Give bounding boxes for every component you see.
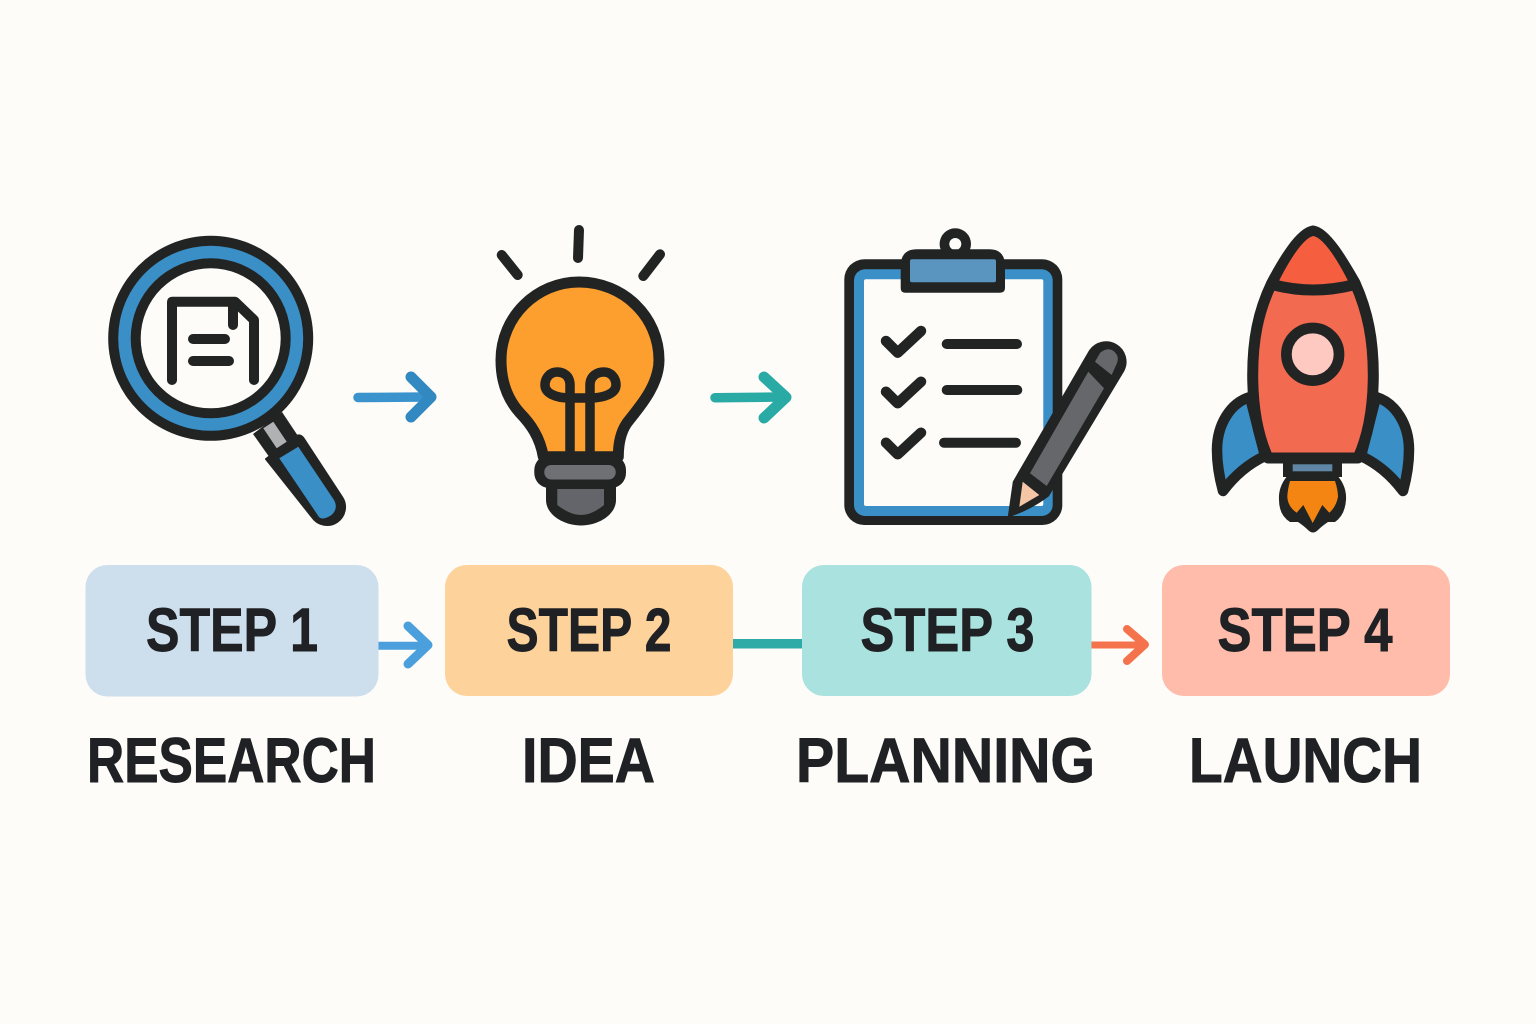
label: research: RESEARCH bbox=[87, 726, 376, 796]
connector arrow: step 1 to step 2 bbox=[378, 626, 428, 664]
step 2 label: STEP 2 bbox=[506, 596, 672, 664]
connector: step 2 to step 3 bbox=[733, 639, 802, 648]
panel: step 3 bbox=[802, 565, 1092, 696]
panel: step 2 bbox=[445, 565, 733, 696]
arrow: research to idea bbox=[358, 377, 431, 417]
icon: magnifying glass over document bbox=[108, 236, 345, 525]
connector arrow: step 3 to step 4 bbox=[1091, 629, 1145, 661]
step 4 label: STEP 4 bbox=[1218, 596, 1393, 664]
label: planning: PLANNING bbox=[796, 726, 1095, 796]
panel: step 1 bbox=[86, 565, 378, 696]
arrow: idea to planning bbox=[715, 377, 786, 418]
panel: step 4 bbox=[1162, 565, 1450, 696]
label: launch: LAUNCH bbox=[1189, 726, 1422, 796]
icon: light bulb bbox=[501, 230, 660, 526]
icon: rocket bbox=[1217, 231, 1409, 532]
label: idea: IDEA bbox=[522, 726, 655, 796]
icon: clipboard with checklist and pencil bbox=[844, 228, 1126, 525]
step 1 label: STEP 1 bbox=[146, 596, 318, 664]
step 3 label: STEP 3 bbox=[860, 596, 1034, 664]
